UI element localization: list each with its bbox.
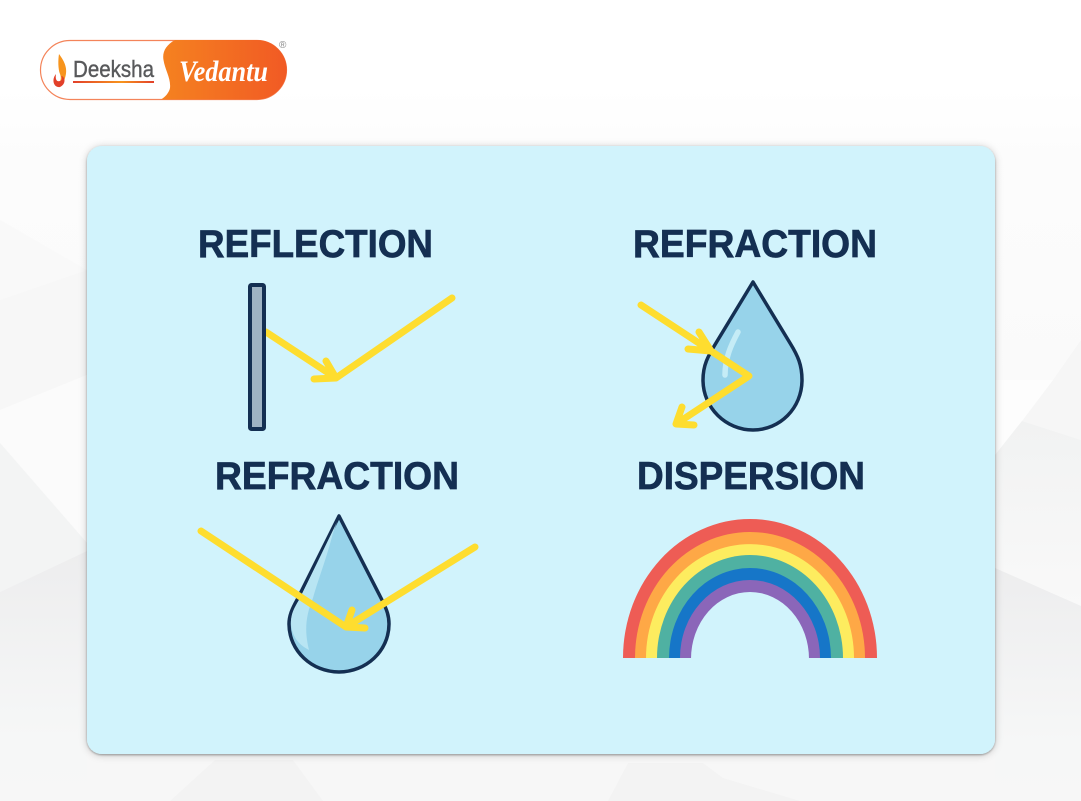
- mirror: [250, 285, 264, 429]
- diagram: refraction through drop, top: [641, 282, 802, 430]
- heading: refraction top: REFRACTION: [633, 223, 877, 266]
- diagram: refraction through drop, bottom: [201, 516, 475, 672]
- logo wordmark Vedantu: Vedantu: [179, 55, 268, 88]
- main panel: [87, 146, 995, 754]
- logo wordmark Deeksha: Deeksha: [73, 56, 155, 82]
- drop highlight: [725, 332, 738, 375]
- band: green: [657, 555, 843, 658]
- logo: Deeksha Vedantu: [40, 40, 287, 100]
- diagram: dispersion rainbow: [623, 519, 877, 659]
- drop highlight: [291, 522, 337, 650]
- rainbow inner: [691, 592, 809, 659]
- heading: dispersion: DISPERSION: [637, 455, 865, 498]
- rays converging: [201, 531, 475, 628]
- water drop: [289, 516, 389, 672]
- logo orange section: [161, 40, 287, 100]
- logo underline: [73, 81, 154, 83]
- heading: refraction bottom: REFRACTION: [215, 455, 459, 498]
- band: yellow: [646, 544, 854, 658]
- reflected ray arrow: [266, 298, 452, 379]
- logo registered mark: ®: [279, 40, 287, 51]
- refracted ray arrows: [641, 305, 749, 425]
- diagram: reflection: [250, 285, 452, 429]
- logo pill outline: [40, 40, 286, 100]
- band: blue: [669, 568, 831, 658]
- logo flame icon: [53, 54, 66, 87]
- band: violet: [680, 580, 820, 658]
- heading: reflection: REFLECTION: [198, 223, 433, 266]
- band: red: [623, 519, 877, 658]
- water drop: [703, 282, 802, 430]
- band: orange: [635, 532, 865, 658]
